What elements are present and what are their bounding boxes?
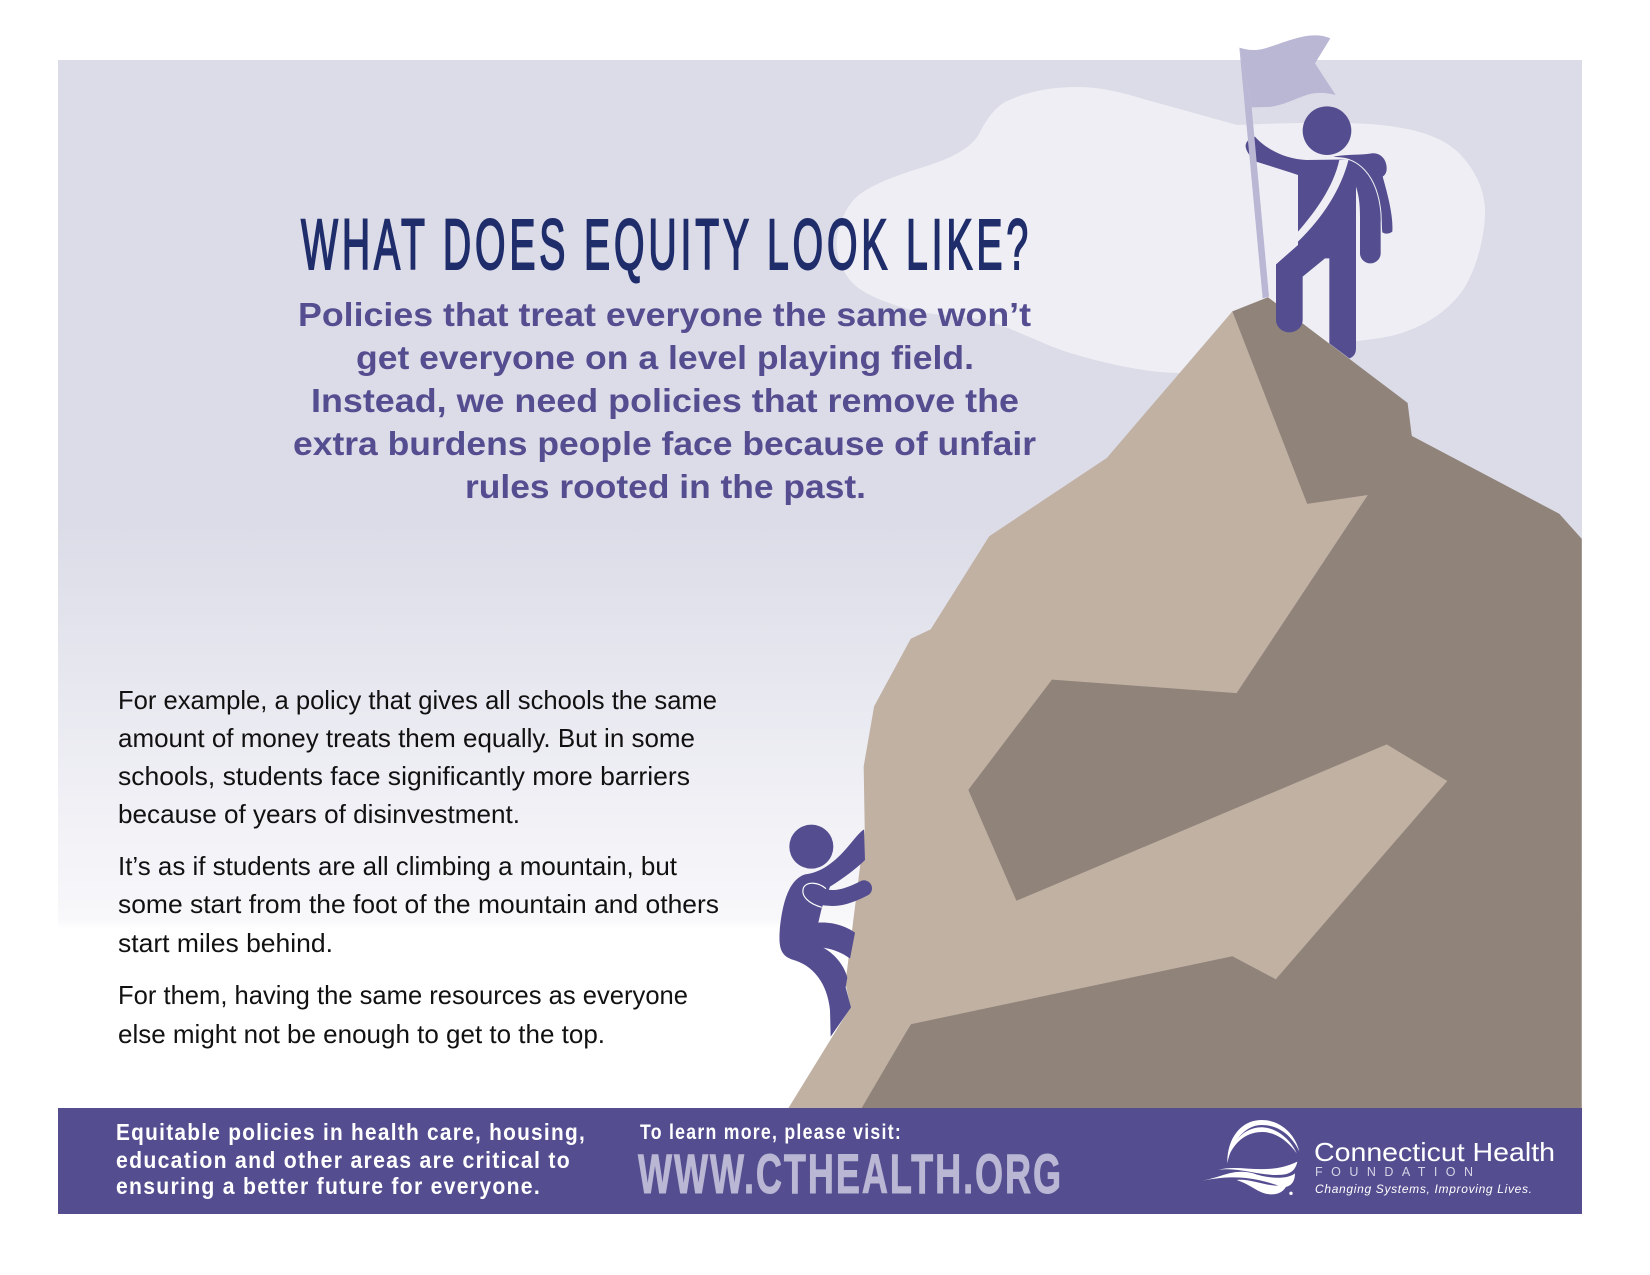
subtitle text block: extra burdens people face because of unfair — [293, 425, 1036, 462]
tagline: Changing Systems, Improving Lives. — [1315, 1182, 1532, 1196]
backpack and lowered arm — [1333, 153, 1392, 263]
head — [1303, 106, 1351, 155]
website url: WWW.CTHEALTH.ORG — [638, 1142, 1063, 1205]
icon: person at summit — [1246, 106, 1392, 358]
icon: foundation logo mark — [1203, 1120, 1299, 1195]
climber head — [789, 825, 833, 869]
footer message: education and other areas are critical to — [116, 1147, 571, 1173]
footer message: Equitable policies in health care, housing, — [116, 1119, 586, 1145]
mountain lit side — [788, 311, 1447, 1109]
flag cloth — [1239, 35, 1336, 107]
body text block: It’s as if students are all climbing a mountain, but — [118, 851, 678, 881]
foundation subtitle: FOUNDATION — [1315, 1165, 1473, 1179]
footer band — [58, 1108, 1582, 1214]
climber arm outline — [803, 883, 826, 907]
body text block: start miles behind. — [118, 928, 333, 958]
icon: climbing person — [779, 825, 865, 1037]
torso, raised arm and legs — [1246, 137, 1356, 358]
subtitle text block — [293, 296, 1036, 505]
icon: flag — [1239, 35, 1336, 298]
climber body and legs — [779, 829, 865, 1037]
cloud — [837, 87, 1485, 373]
body text block: because of years of disinvestment. — [118, 799, 520, 829]
backpack strap line — [1335, 158, 1382, 233]
mountain shadow side — [858, 297, 1582, 1109]
mountain — [788, 297, 1582, 1109]
subtitle text block: Instead, we need policies that remove the — [311, 382, 1019, 419]
body text block: For example, a policy that gives all schools the same — [118, 685, 717, 715]
subtitle text block: rules rooted in the past. — [465, 468, 866, 505]
footer message: ensuring a better future for everyone. — [116, 1173, 541, 1199]
body text block: some start from the foot of the mountain and others — [118, 889, 719, 919]
learn more label: To learn more, please visit: — [640, 1121, 902, 1144]
body text block — [118, 685, 719, 1049]
body text block: For them, having the same resources as everyone — [118, 980, 688, 1010]
title: WHAT DOES EQUITY LOOK LIKE? — [301, 206, 1032, 285]
sash — [1276, 159, 1349, 264]
subtitle text block: Policies that treat everyone the same won’t — [298, 296, 1031, 333]
subtitle text block: get everyone on a level playing field. — [356, 339, 974, 376]
flag pole — [1239, 48, 1269, 298]
footer message — [116, 1119, 586, 1199]
body text block: schools, students face significantly more barriers — [118, 761, 690, 791]
body text block: amount of money treats them equally. But in some — [118, 723, 695, 753]
panel: sky background — [58, 60, 1582, 1108]
body text block: else might not be enough to get to the top. — [118, 1019, 605, 1049]
climber reaching arm — [812, 888, 864, 898]
foundation name: Connecticut Health — [1314, 1137, 1555, 1167]
